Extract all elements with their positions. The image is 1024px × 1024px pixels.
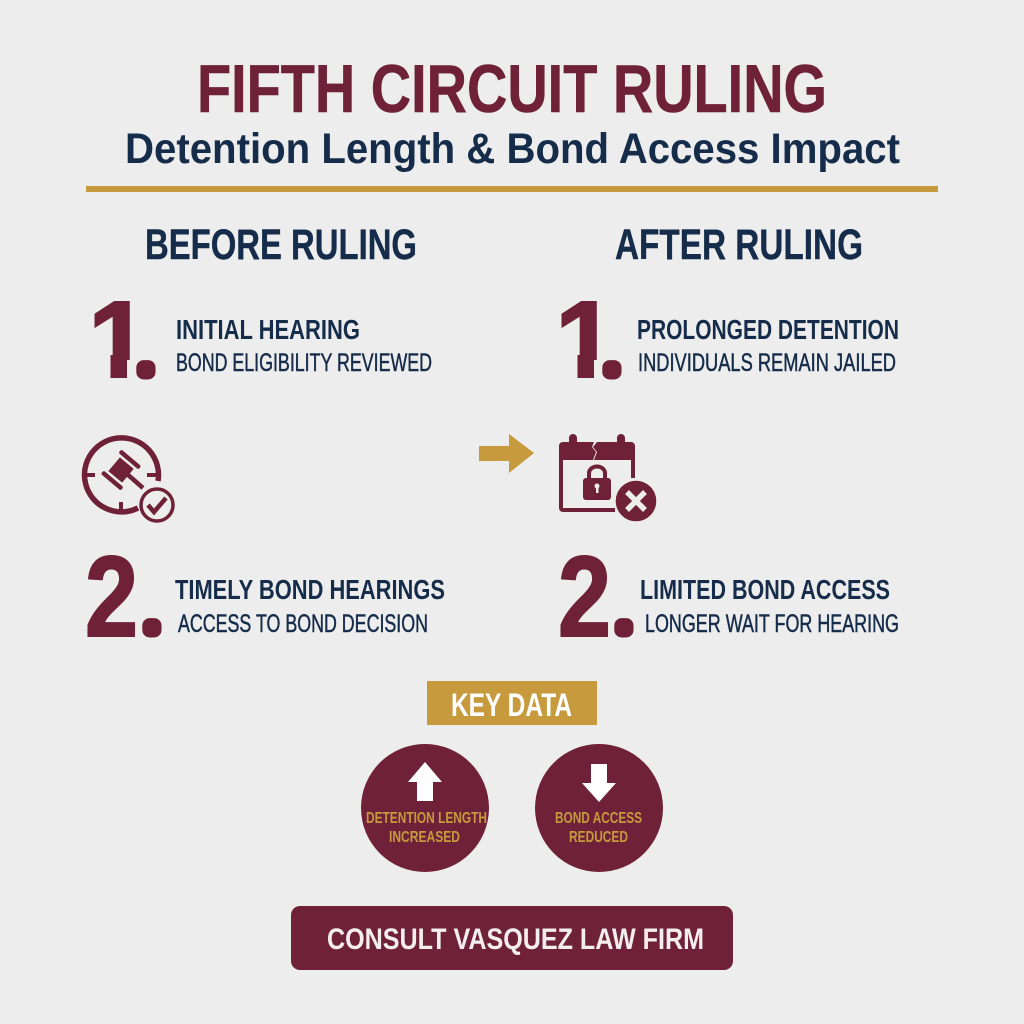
after step 2: 2 xyxy=(558,534,611,661)
icon: broken calendar with lock and x xyxy=(559,434,657,522)
heading: after ruling: AFTER RULING xyxy=(615,221,863,269)
stat: detention length increased: DETENTION LENGTH xyxy=(366,810,487,827)
after step 1 xyxy=(551,279,899,402)
arrow: before to after xyxy=(479,434,534,473)
before step 2 xyxy=(85,534,445,661)
before step 1: . xyxy=(142,346,150,379)
before step 2: TIMELY BOND HEARINGS xyxy=(175,574,445,605)
stat: detention length increased: INCREASED xyxy=(389,829,460,846)
before step 2: 2 xyxy=(85,534,138,661)
before step 2: ACCESS TO BOND DECISION xyxy=(178,610,428,638)
call to action button xyxy=(291,906,733,970)
after step 2: LONGER WAIT FOR HEARING xyxy=(645,610,899,638)
title: FIFTH CIRCUIT RULING xyxy=(197,51,827,127)
before step 2: . xyxy=(148,604,156,637)
before step 1 xyxy=(84,279,432,402)
subtitle: Detention Length & Bond Access Impact xyxy=(125,125,900,173)
stat: bond access reduced xyxy=(535,744,663,872)
key data label xyxy=(427,681,597,725)
after step 1: 1 xyxy=(555,279,616,402)
after step 2: LIMITED BOND ACCESS xyxy=(640,574,890,605)
key data label: KEY DATA xyxy=(451,687,572,723)
before step 1: BOND ELIGIBILITY REVIEWED xyxy=(176,349,432,377)
heading: before ruling: BEFORE RULING xyxy=(145,221,417,269)
after step 1: . xyxy=(608,346,616,379)
after step 1: INDIVIDUALS REMAIN JAILED xyxy=(638,349,896,377)
after step 2: . xyxy=(620,604,628,637)
stat: bond access reduced: REDUCED xyxy=(569,829,628,846)
stat: bond access reduced: BOND ACCESS xyxy=(555,810,642,827)
icon: gavel in clock with check xyxy=(84,438,173,521)
before step 1: INITIAL HEARING xyxy=(176,314,360,345)
stat: detention length increased xyxy=(361,744,489,872)
after step 1: PROLONGED DETENTION xyxy=(637,314,899,345)
after step 2 xyxy=(558,534,899,661)
before step 1: 1 xyxy=(88,279,149,402)
call to action button: CONSULT VASQUEZ LAW FIRM xyxy=(327,923,704,956)
